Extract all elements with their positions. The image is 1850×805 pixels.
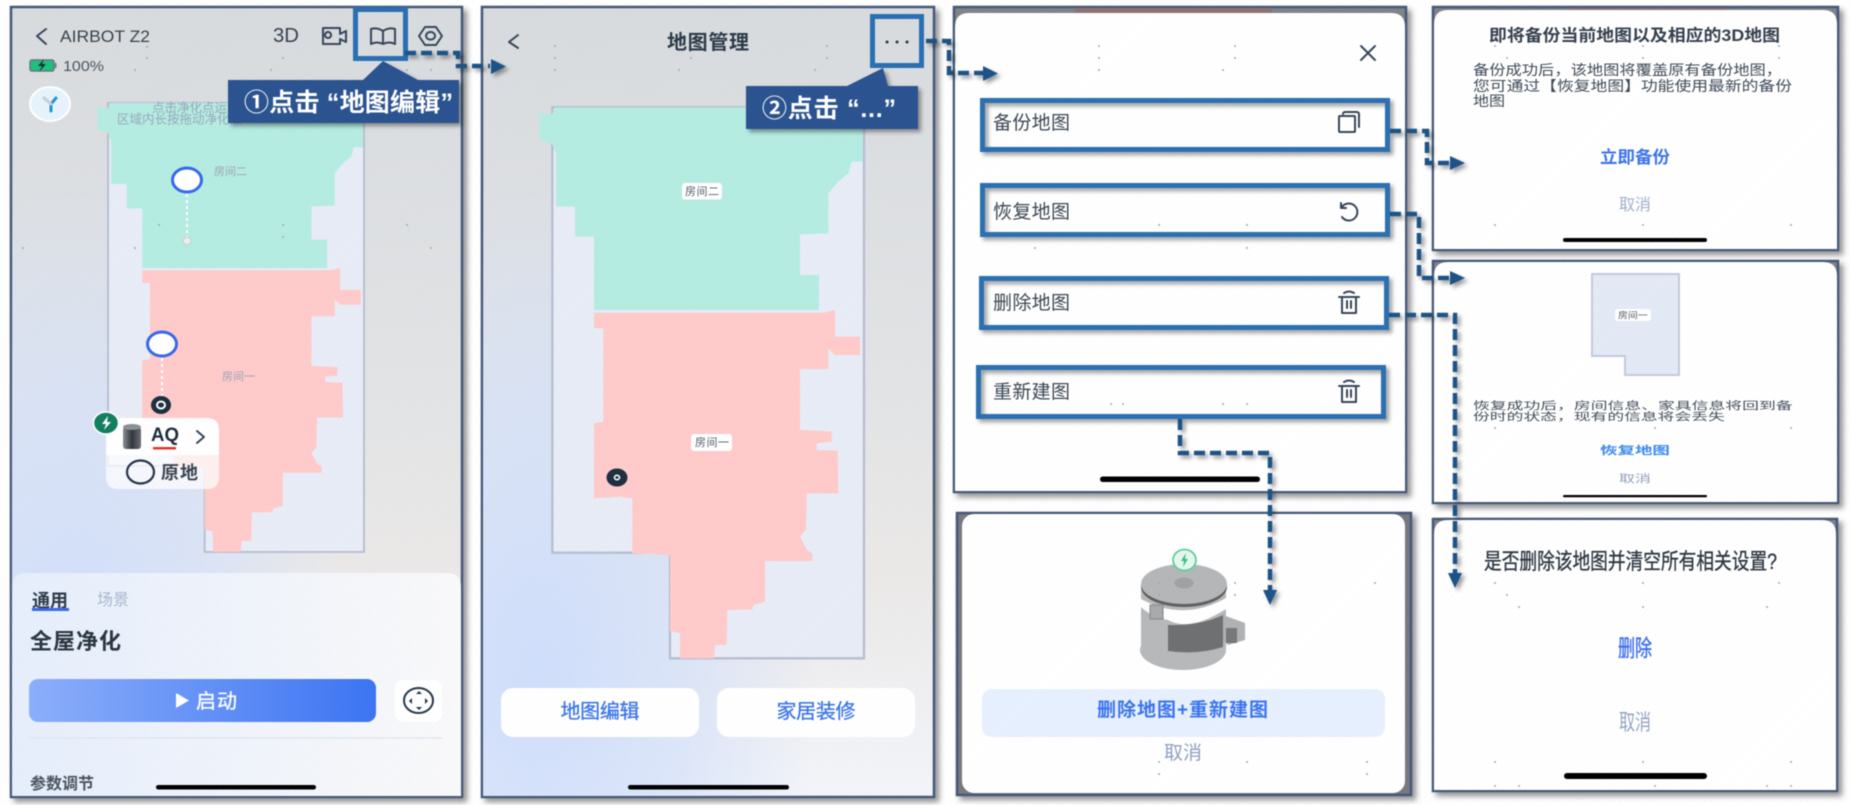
device popup: 原地 <box>161 463 198 483</box>
mode title: 全屋净化 <box>30 629 121 654</box>
dialog body: 恢复成功后，房间信息、家具信息将回到备 <box>1473 399 1793 411</box>
panel: delete dialog <box>1433 519 1837 791</box>
backup map thumbnail <box>1592 274 1679 375</box>
cancel: 取消 <box>1164 742 1202 764</box>
bottom sheet <box>12 573 461 796</box>
arrow: step 1 to map management <box>405 53 506 74</box>
backup now: 立即备份 <box>1600 147 1670 167</box>
dialog body: 地图 <box>1473 93 1505 109</box>
button: home decoration <box>717 688 915 737</box>
arrow: restore to restore dialog <box>1390 214 1465 285</box>
dialog body <box>1473 399 1793 422</box>
parameters label: 参数调节 <box>30 774 94 793</box>
menu item: restore map <box>982 186 1388 234</box>
home indicator <box>628 785 789 790</box>
button: map edit: 地图编辑 <box>560 700 640 723</box>
robot position marker <box>606 468 628 486</box>
room labels <box>214 165 255 383</box>
home indicator <box>156 785 316 790</box>
restore map: 恢复地图 <box>1600 444 1670 457</box>
back chevron <box>509 35 518 48</box>
button: delete and rebuild <box>982 689 1385 737</box>
device popup <box>94 412 219 489</box>
menu item: backup map <box>982 100 1388 150</box>
panel: map management screen <box>482 7 934 797</box>
callout: step 1 <box>228 61 459 123</box>
hint text behind callout <box>117 101 242 126</box>
icon: map <box>371 28 395 44</box>
callout: step 2: ②点击 “...” <box>762 95 896 123</box>
cancel: 取消 <box>1619 196 1651 214</box>
home indicator <box>1564 773 1707 779</box>
start button <box>29 679 376 722</box>
tab: scene: 场景 <box>97 591 129 609</box>
button: home decoration: 家居装修 <box>776 700 856 723</box>
purification point pin: room two <box>172 168 202 244</box>
arrow: backup to backup dialog <box>1390 131 1465 170</box>
tab: general: 通用 <box>32 591 68 611</box>
panel: device home map screen <box>11 7 462 797</box>
backup map thumbnail: 房间一 <box>1618 310 1648 321</box>
cancel: 取消 <box>1619 711 1651 736</box>
room label: room one <box>691 434 732 451</box>
dialog body <box>1473 62 1792 109</box>
floor map <box>539 107 864 658</box>
icon: camera <box>323 28 346 44</box>
device name: AIRBOT Z2 <box>60 27 150 46</box>
room label: room two <box>682 183 722 200</box>
device illustration <box>1140 550 1245 670</box>
room label: room two: 房间二 <box>685 185 719 198</box>
battery status: 100% <box>63 58 104 75</box>
arrow: rebuild to rebuild confirmation <box>1180 419 1277 605</box>
callout: step 2 <box>746 68 918 129</box>
floor map <box>97 103 364 552</box>
highlight: more button <box>872 16 922 66</box>
menu item: restore map: 恢复地图 <box>993 201 1070 223</box>
room labels: 房间一 <box>222 370 255 383</box>
back chevron <box>37 29 46 44</box>
callout: step 1: ①点击 “地图编辑” <box>244 89 453 117</box>
dialog body: 您可通过【恢复地图】功能使用最新的备份 <box>1473 78 1792 94</box>
home indicator <box>1563 238 1707 242</box>
icon: close <box>1361 46 1375 60</box>
device popup: AQ <box>151 425 179 446</box>
panel: backup dialog <box>1433 7 1838 250</box>
button: map edit <box>501 688 699 737</box>
hint text behind callout: 点击净化点运 <box>152 101 228 115</box>
menu item: rebuild map: 重新建图 <box>993 381 1070 403</box>
purification point pin: room one <box>148 332 176 414</box>
arrow: delete to delete dialog <box>1389 315 1462 588</box>
highlight: map icon <box>356 10 406 58</box>
panel: restore dialog <box>1433 261 1838 503</box>
panel: rebuild confirmation <box>957 513 1411 795</box>
screen title: 地图管理 <box>667 31 749 54</box>
dialog title: 是否删除该地图并清空所有相关设置? <box>1484 549 1777 574</box>
hint text behind callout: 区域内长按拖动净化点 <box>117 112 242 126</box>
start button: 启动 <box>196 690 237 713</box>
panel: map menu <box>954 7 1406 492</box>
dialog body: 备份成功后，该地图将覆盖原有备份地图， <box>1473 62 1782 78</box>
icon: more dots <box>887 40 907 44</box>
arrow: step 2 to map menu <box>926 41 998 81</box>
home indicator <box>1563 495 1707 497</box>
room label: room one: 房间一 <box>695 436 729 449</box>
home indicator <box>1100 476 1260 482</box>
3D button: 3D <box>273 25 299 47</box>
icon: fan button <box>30 87 70 121</box>
menu item: rebuild map <box>978 368 1384 416</box>
room labels: 房间二 <box>214 165 247 178</box>
delete: 删除 <box>1618 636 1652 662</box>
menu item: delete map: 删除地图 <box>993 292 1070 314</box>
menu item: backup map: 备份地图 <box>993 112 1070 134</box>
dialog title: 即将备份当前地图以及相应的3D地图 <box>1489 25 1780 45</box>
button: delete and rebuild: 删除地图+重新建图 <box>1097 698 1268 721</box>
icon: settings hexagon <box>419 27 442 45</box>
dialog body: 份时的状态，现有的信息将会丢失 <box>1473 410 1725 422</box>
cancel: 取消 <box>1619 473 1651 484</box>
battery status <box>30 58 104 75</box>
menu item: delete map <box>982 278 1386 328</box>
direction control button <box>395 680 442 722</box>
